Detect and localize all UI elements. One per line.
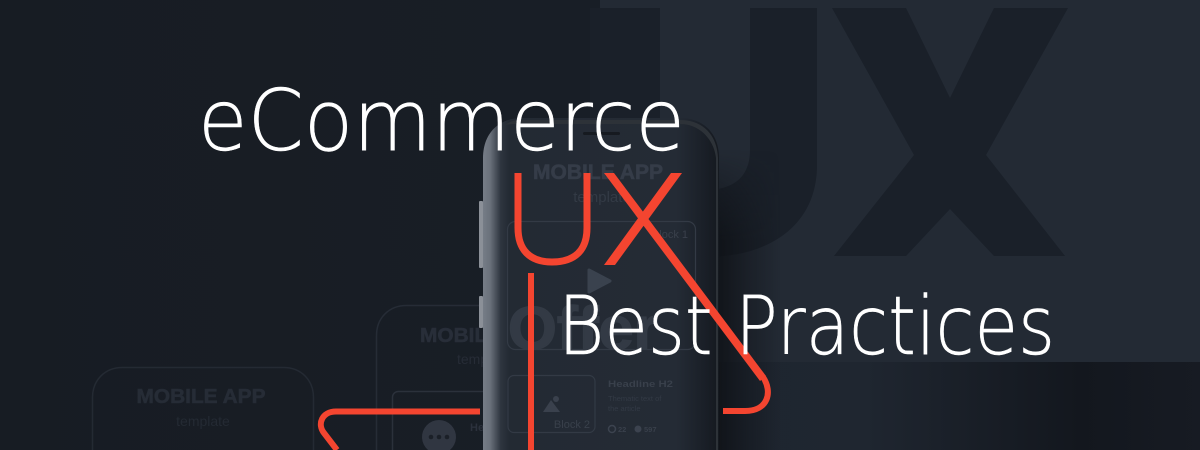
block 1: Offer (508, 295, 658, 362)
title: Best Practices: Best Practices (558, 280, 1055, 374)
block 2: Block 2 (554, 419, 590, 431)
ghost phone card: middle (376, 306, 549, 450)
red triangle line left segment (321, 412, 480, 450)
article text (608, 379, 673, 434)
big background letters UX (590, 8, 1068, 257)
screen heading: MOBILE APP (533, 161, 663, 184)
block 1: Block 1 (652, 229, 688, 241)
side buttons (479, 201, 483, 328)
article text: Thematic text of (608, 394, 662, 403)
block 2 (508, 376, 595, 432)
speaker (583, 132, 620, 135)
ghost phone card: middle: He (470, 422, 484, 434)
ghost phone card: left: template (176, 413, 230, 429)
ghost phone card: left (92, 368, 314, 450)
block 1 (508, 222, 696, 362)
phone shadow (719, 178, 758, 450)
article text: the article (608, 404, 641, 413)
title: eCommerce: eCommerce (198, 72, 685, 171)
article text: 22 (618, 425, 626, 434)
phone body (483, 118, 719, 450)
panel: lower fade (720, 362, 1200, 450)
red letter U (518, 173, 587, 262)
phone mockup (479, 118, 719, 450)
article text: Headline H2 (608, 379, 673, 390)
ghost phone card: middle: template (457, 351, 511, 367)
article text: 597 (644, 425, 657, 434)
red vertical line (528, 273, 534, 450)
panel: lighter backdrop (600, 0, 1200, 362)
red triangle line right segment (723, 377, 768, 411)
red letter X (604, 173, 766, 381)
screen subheading: template (573, 189, 631, 206)
ghost phone card: left: MOBILE APP (136, 386, 266, 408)
top edge highlight (505, 120, 718, 450)
ghost phone card: middle: MOBILE APP (420, 325, 549, 347)
